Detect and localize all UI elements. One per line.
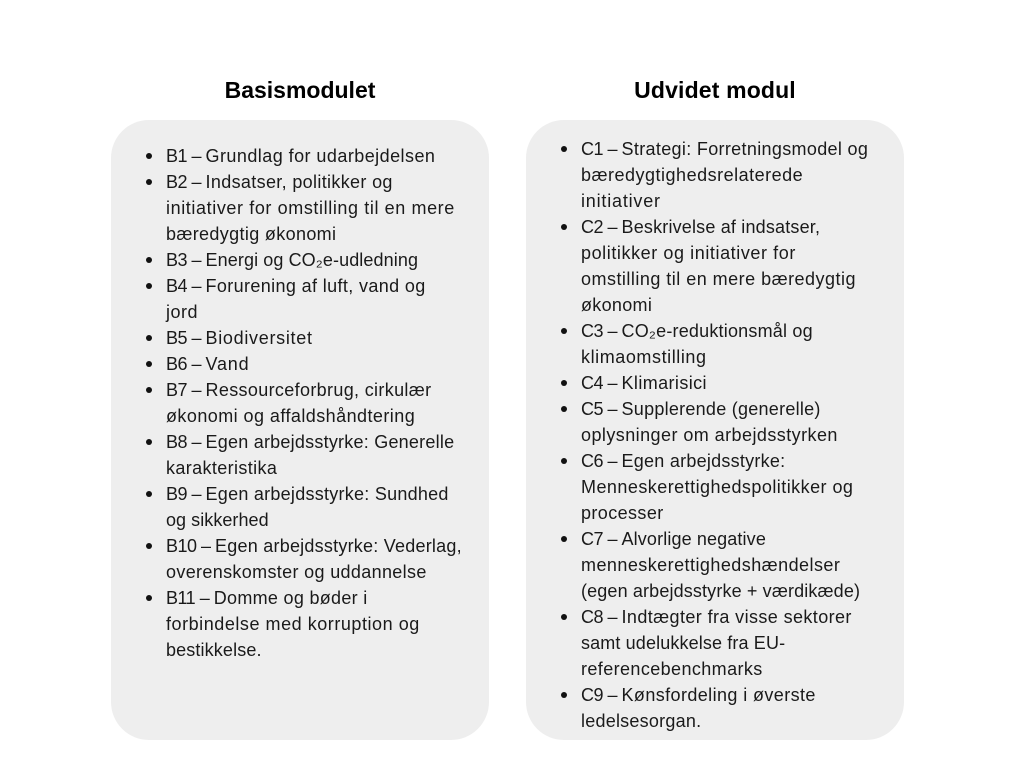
- list item C7: (egen arbejdsstyrke + værdikæde): [581, 581, 860, 601]
- list item B10: B10 – Egen arbejdsstyrke: Vederlag,: [166, 536, 462, 556]
- list item C5: [561, 399, 838, 445]
- list item B7: økonomi og affaldshåndtering: [166, 406, 415, 426]
- heading: Basismodulet: Basismodulet: [225, 77, 375, 103]
- list item B10: overenskomster og uddannelse: [166, 562, 427, 582]
- list item C6: processer: [581, 503, 664, 523]
- panel: Basismodulet list: [111, 120, 489, 740]
- list item C2: omstilling til en mere bæredygtig: [581, 269, 856, 289]
- list item B6: B6 – Vand: [166, 354, 249, 374]
- list item C7: [561, 529, 860, 601]
- list item C1: C1 – Strategi: Forretningsmodel og: [581, 139, 868, 159]
- list item C2: [561, 217, 856, 315]
- list item B1: B1 – Grundlag for udarbejdelsen: [166, 146, 435, 166]
- list item B11: forbindelse med korruption og: [166, 614, 420, 634]
- list item C8: referencebenchmarks: [581, 659, 763, 679]
- list item C3: klimaomstilling: [581, 347, 707, 367]
- list item C2: C2 – Beskrivelse af indsatser,: [581, 217, 820, 237]
- list item C8: C8 – Indtægter fra visse sektorer: [581, 607, 852, 627]
- list item B8: B8 – Egen arbejdsstyrke: Generelle: [166, 432, 454, 452]
- list item C1: bæredygtighedsrelaterede: [581, 165, 803, 185]
- list item B11: [146, 588, 420, 660]
- list item C5: oplysninger om arbejdsstyrken: [581, 425, 838, 445]
- list item C8: [561, 607, 852, 679]
- list item B2: bæredygtig økonomi: [166, 224, 336, 244]
- list item B10: [146, 536, 462, 582]
- list item C1: [561, 139, 868, 211]
- list item B4: B4 – Forurening af luft, vand og: [166, 276, 426, 296]
- list item C2: økonomi: [581, 295, 652, 315]
- list item B4: [146, 276, 426, 322]
- heading: Udvidet modul: Udvidet modul: [634, 77, 796, 103]
- list item C5: C5 – Supplerende (generelle): [581, 399, 821, 419]
- list item C9: C9 – Kønsfordeling i øverste: [581, 685, 816, 705]
- list item C7: C7 – Alvorlige negative: [581, 529, 766, 549]
- list item B7: B7 – Ressourceforbrug, cirkulær: [166, 380, 431, 400]
- list item C9: ledelsesorgan.: [581, 711, 701, 731]
- list item C4: C4 – Klimarisici: [581, 373, 707, 393]
- list item B9: og sikkerhed: [166, 510, 269, 530]
- panel: Udvidet modul list: [526, 120, 904, 740]
- list item C1: initiativer: [581, 191, 661, 211]
- list item C6: C6 – Egen arbejdsstyrke:: [581, 451, 785, 471]
- list item B2: B2 – Indsatser, politikker og: [166, 172, 393, 192]
- list item C9: [561, 685, 816, 731]
- list item C7: menneskerettighedshændelser: [581, 555, 840, 575]
- list item B9: B9 – Egen arbejdsstyrke: Sundhed: [166, 484, 449, 504]
- list item B11: bestikkelse.: [166, 640, 262, 660]
- list item C2: politikker og initiativer for: [581, 243, 796, 263]
- list item C3: [561, 321, 813, 367]
- list item B2: [146, 172, 455, 244]
- list item B8: [146, 432, 454, 478]
- list item B3: B3 – Energi og CO₂e-udledning: [166, 250, 418, 270]
- list item B7: [146, 380, 431, 426]
- list item B11: B11 – Domme og bøder i: [166, 588, 368, 608]
- list item B5: B5 – Biodiversitet: [166, 328, 313, 348]
- list item B4: jord: [166, 302, 198, 322]
- list item B9: [146, 484, 449, 530]
- list item C8: samt udelukkelse fra EU-: [581, 633, 785, 653]
- list item B8: karakteristika: [166, 458, 277, 478]
- list item C6: Menneskerettighedspolitikker og: [581, 477, 853, 497]
- list item C6: [561, 451, 853, 523]
- list item C3: C3 – CO₂e-reduktionsmål og: [581, 321, 813, 341]
- list item B2: initiativer for omstilling til en mere: [166, 198, 455, 218]
